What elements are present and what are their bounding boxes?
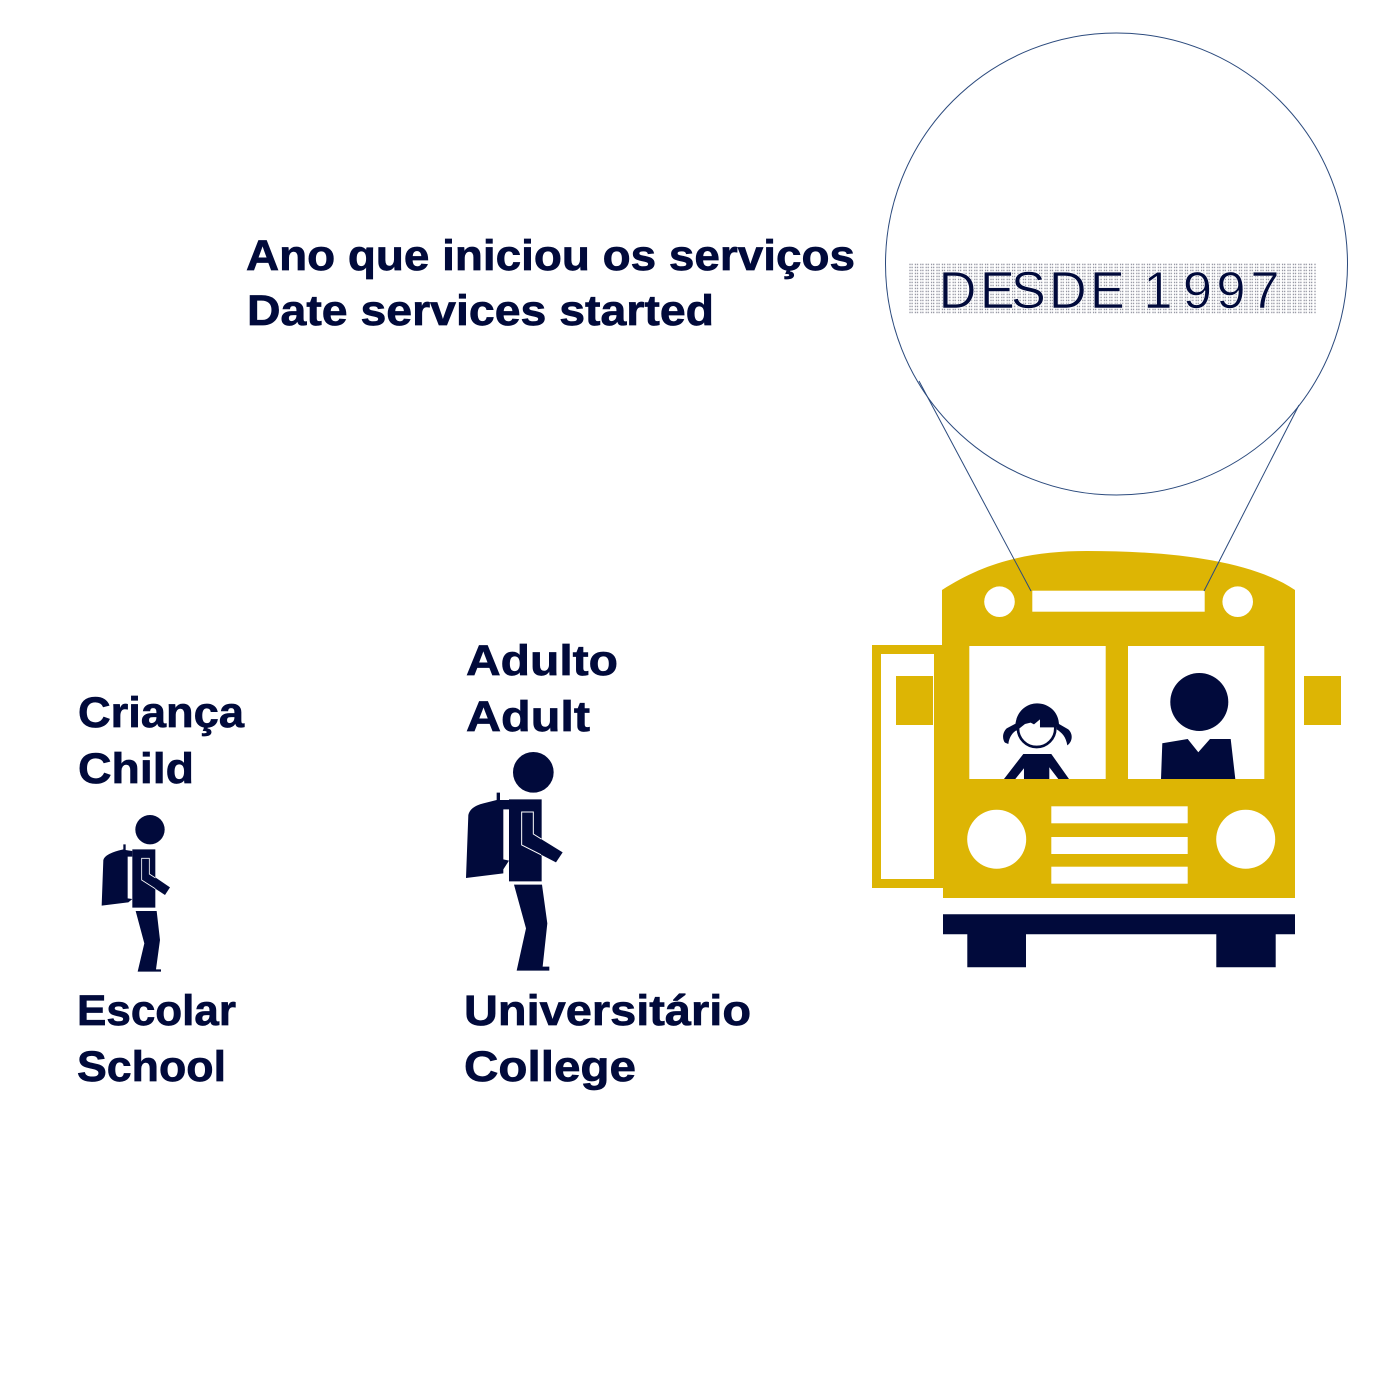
top lights [984, 586, 1253, 617]
label: adult: Adulto [466, 637, 618, 685]
sign text: desde 1997: DESDE 1997 [939, 262, 1279, 320]
bumper and wheels [943, 914, 1295, 967]
label: school [77, 987, 236, 1091]
heading: date services started [246, 232, 855, 335]
label: child [78, 689, 245, 793]
label: adult [466, 637, 618, 741]
destination sign [1032, 591, 1205, 612]
label: child: Criança [78, 689, 245, 737]
heading: date services started: Ano que iniciou os serviços [246, 232, 855, 280]
bus door [872, 645, 943, 888]
label: college [464, 987, 751, 1091]
callout connector lines [919, 381, 1299, 591]
icon: child with backpack [102, 815, 170, 972]
label: school: Escolar [77, 987, 236, 1035]
magnifier callout circle [886, 33, 1348, 495]
door window [896, 676, 933, 725]
windows [969, 646, 1264, 779]
heading: date services started: Date services started [247, 287, 714, 335]
driver [1161, 673, 1235, 779]
bus mirror [1304, 676, 1341, 725]
label: college: Universitário [464, 987, 751, 1035]
label: adult: Adult [466, 693, 590, 741]
dotted sign band [909, 263, 1316, 314]
headlights [967, 810, 1275, 869]
icon: adult with backpack [466, 752, 563, 971]
grille [1051, 806, 1188, 884]
bus body [942, 551, 1295, 898]
label: child: Child [78, 745, 194, 793]
school bus illustration [872, 551, 1341, 967]
label: school: School [77, 1043, 226, 1091]
girl passenger [1003, 703, 1072, 779]
label: college: College [464, 1043, 636, 1091]
